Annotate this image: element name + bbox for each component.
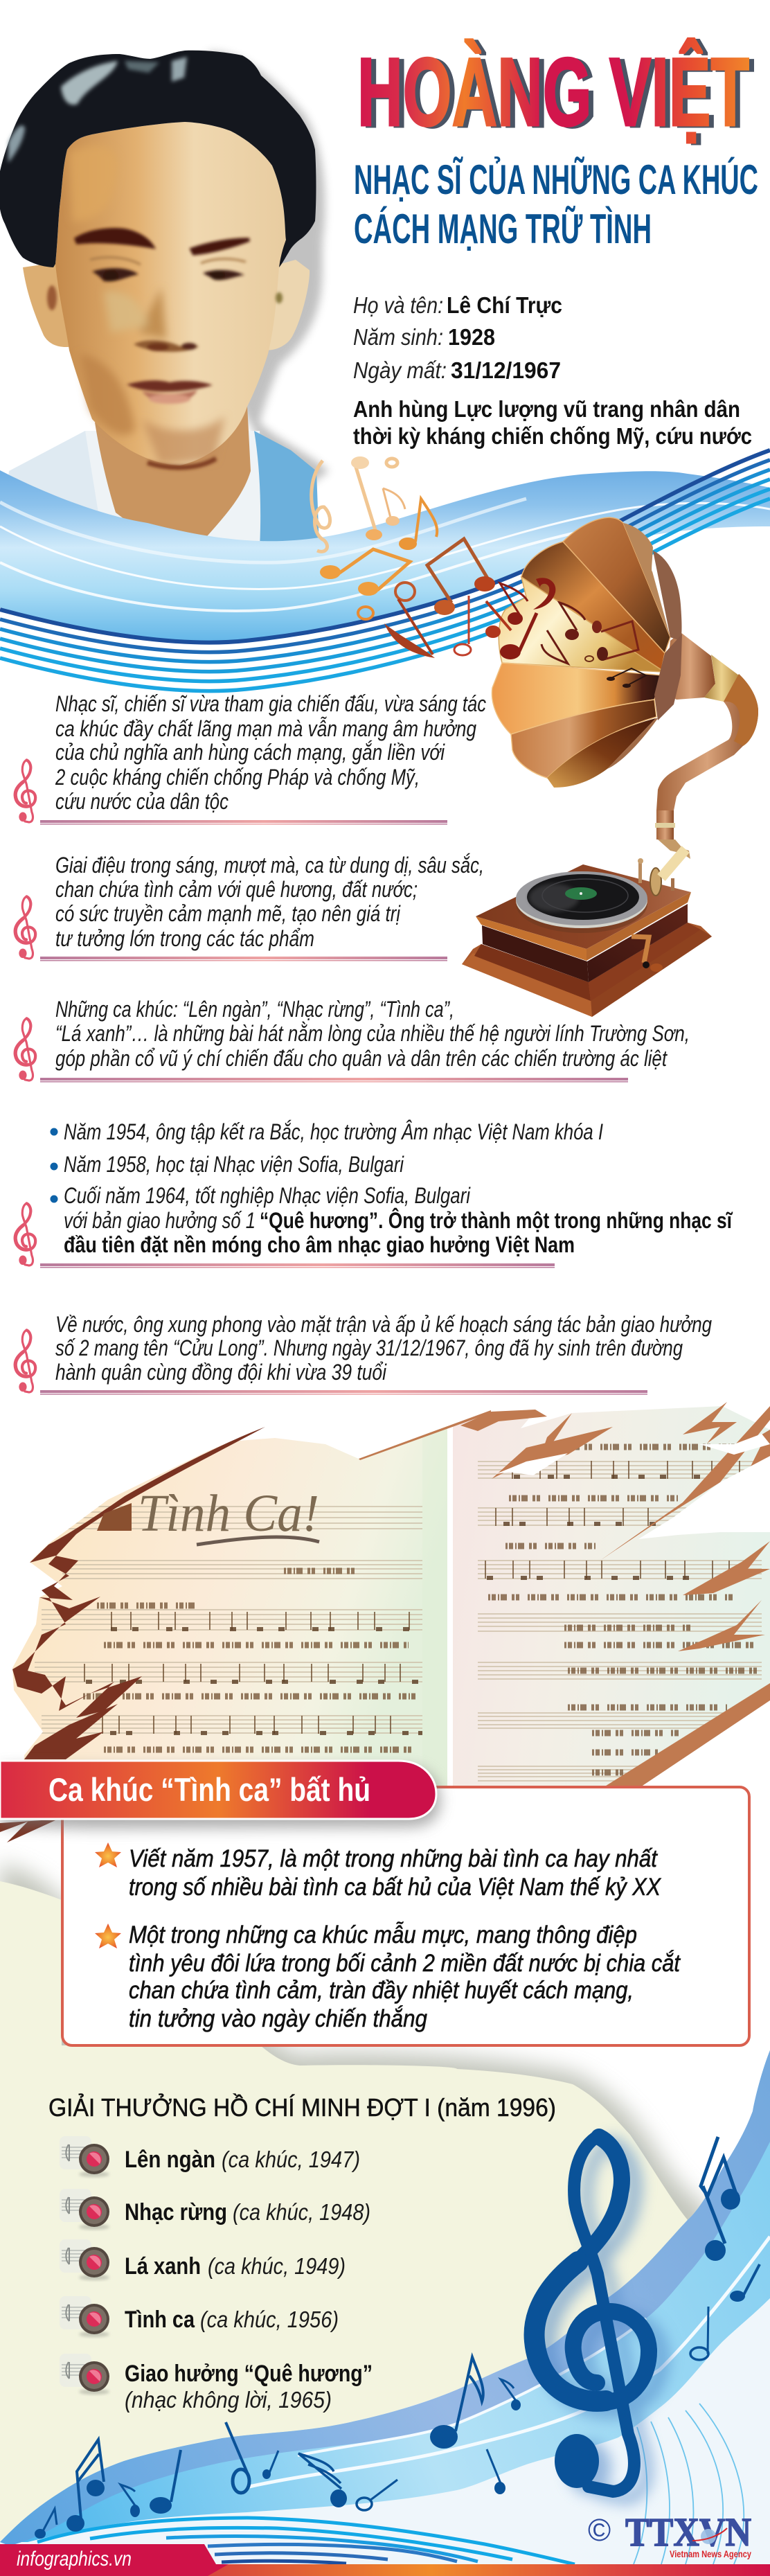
text block: composer and soldier (55, 691, 486, 814)
icon: pink treble clef 5 (15, 1330, 35, 1392)
award: Lá xanh: Lá xanh (125, 2253, 201, 2280)
pale base (0, 2251, 770, 2564)
wave: staff stripes (0, 450, 770, 691)
text: exemplary song: Một trong những ca khúc mẫu mực, mang thông điệp (129, 1921, 637, 1948)
hair highlights (8, 57, 187, 163)
text block: songs: Những ca khúc: “Lên ngàn”, “Nhạc rừng”, “Tình ca”, (55, 997, 454, 1022)
biography facts (353, 292, 752, 449)
award: Nhạc rừng: Nhạc rừng (125, 2199, 227, 2226)
text: exemplary song: chan chứa tình cảm, tràn đầy nhiệt huyết cách mạng, (129, 1977, 634, 2004)
text block: composer and soldier: 2 cuộc kháng chiến chống Pháp và chống Mỹ, (55, 765, 420, 790)
logo: TTXVN: © (588, 2512, 611, 2548)
award: Nhạc rừng: (ca khúc, 1948) (233, 2199, 370, 2225)
cream panel (0, 1881, 688, 2542)
text block: study timeline: với bản giao hưởng số 1 (64, 1208, 256, 1233)
text block: songs (55, 997, 690, 1071)
gramophone (462, 517, 758, 1017)
music notes: rising from the horn (312, 456, 646, 688)
portrait shadow (208, 52, 329, 499)
clothes (0, 431, 319, 547)
text block: sacrifice: hành quân cùng đồng đội khi vừa 39 tuổi (55, 1360, 387, 1385)
text block: composer and soldier: cứu nước của dân tộc (55, 789, 229, 814)
text block: composer and soldier: ca khúc đầy chất lãng mạn mà vẫn mang âm hưởng (55, 716, 476, 741)
biography facts: Năm sinh: (353, 324, 443, 350)
face shading (69, 145, 225, 464)
logo: TTXVN: TTXVN (625, 2510, 751, 2555)
turntable box (462, 864, 712, 1017)
torn paper edges: dark brown (0, 1427, 265, 1842)
periwinkle band (0, 2050, 770, 2546)
award: Tình ca: (ca khúc, 1956) (200, 2307, 339, 2332)
icon: pink treble clef 3 (15, 1018, 35, 1081)
hair (0, 51, 316, 267)
face (55, 122, 286, 465)
biography facts: Ngày mất: (353, 357, 447, 383)
text: exemplary song: tin tưởng vào ngày chiến thắng (129, 2005, 427, 2032)
handwritten notes and lyrics (76, 1447, 762, 1773)
biography facts: Họ và tên: (353, 292, 443, 318)
icon: disc 4 (60, 2296, 109, 2337)
biography facts: 31/12/1967 (451, 357, 561, 383)
divider 4 (40, 1263, 555, 1268)
fine arcs (634, 2404, 744, 2564)
staff stripes (37, 2518, 575, 2564)
handwritten song title: Tình Ca! (138, 1484, 319, 1543)
text block: study timeline: Năm 1954, ông tập kết ra Bắc, học trường Âm nhạc Việt Nam khóa I (64, 1119, 603, 1144)
text block: melody: có sức truyền cảm mạnh mẽ, tạo nên giá trị (55, 901, 401, 926)
panel: Tình ca (62, 1787, 749, 2045)
text: written in 1957 (129, 1845, 661, 1901)
logo: TTXVN (588, 2510, 751, 2559)
text block: study timeline: Cuối năm 1964, tốt nghiệp Nhạc viện Sofia, Bulgari (64, 1183, 471, 1208)
pages (0, 1399, 770, 1801)
heading: Hồ Chí Minh prize: GIẢI THƯỞNG HỒ CHÍ MINH ĐỢT I (năm 1996) (48, 2093, 556, 2122)
text block: melody: tư tưởng lớn trong các tác phẩm (55, 926, 314, 951)
wave: top blue swoosh (0, 470, 770, 643)
icon: disc 2 (60, 2189, 109, 2230)
award: Giao hưởng Quê hương: (nhạc không lời, 1965) (125, 2387, 332, 2413)
award list (60, 2136, 373, 2413)
award: Lá xanh: (ca khúc, 1949) (208, 2253, 346, 2279)
notes over left band (35, 2440, 181, 2539)
text: written in 1957: trong số nhiều bài tình ca bất hủ của Việt Nam thế kỷ XX (129, 1874, 661, 1901)
footer tab: infographics.vn: infographics.vn (17, 2548, 132, 2570)
facial features (47, 230, 283, 468)
icon: disc 5 (60, 2354, 109, 2395)
red-brown notes (384, 539, 511, 658)
torn paper gashes: white (496, 1434, 770, 1794)
icon: pink treble clef 4 (15, 1203, 35, 1265)
cyan band (0, 2050, 770, 2542)
award: Giao hưởng Quê hương: Giao hưởng “Quê hương” (125, 2361, 373, 2387)
white streaks (249, 2237, 770, 2487)
notes over middle band (226, 2357, 521, 2510)
pale and orange notes (312, 456, 437, 619)
star bullet 2 (95, 1924, 121, 1948)
divider 1 (40, 820, 447, 824)
text block: sacrifice (55, 1312, 712, 1385)
record on platter (516, 871, 647, 933)
icon: pink treble clef 1 (15, 760, 35, 822)
sheet music manuscript (0, 1399, 770, 1842)
ears and neck (23, 260, 310, 547)
award: Lên ngàn (125, 2147, 360, 2173)
text: exemplary song (129, 1921, 681, 2032)
logo: TTXVN: Vietnam News Agency (670, 2549, 751, 2559)
text block: study timeline: đầu tiên đặt nền móng cho âm nhạc giao hưởng Việt Nam (64, 1232, 575, 1257)
banner: Ca khúc Tình ca bất hủ: Ca khúc “Tình ca” bất hủ (48, 1771, 370, 1808)
blue music notes (35, 2137, 760, 2539)
subtitle (354, 157, 758, 252)
notes over right band (690, 2137, 760, 2360)
text block: composer and soldier: Nhạc sĩ, chiến sĩ vừa tham gia chiến đấu, vừa sáng tác (55, 691, 486, 716)
footer tab: infographics.vn (0, 2544, 229, 2576)
award: Lá xanh (125, 2253, 346, 2280)
text block: melody: chan chứa tình cảm với quê hương, đất nước; (55, 877, 418, 902)
award: Tình ca (125, 2307, 339, 2333)
star bullet 1 (95, 1842, 121, 1867)
banner: Ca khúc Tình ca bất hủ (0, 1761, 440, 1829)
cream panel shadow (0, 1863, 710, 2424)
horn petals (492, 517, 682, 788)
text block: composer and soldier: của chủ nghĩa anh hùng cách mạng, gắn liền với (55, 740, 445, 765)
big blue treble clef (535, 2135, 661, 2498)
award: Nhạc rừng (125, 2199, 370, 2226)
text: written in 1957: Viết năm 1957, là một trong những bài tình ca hay nhất (129, 1845, 658, 1872)
footer bar (0, 2564, 770, 2576)
biography facts: Lê Chí Trực (447, 292, 562, 318)
icon: pink treble clef 2 (15, 896, 35, 959)
biography facts: 1928 (448, 324, 495, 350)
icon: disc 1 (60, 2136, 109, 2177)
tonearm and crank (632, 849, 686, 972)
portrait: Hoàng Việt (0, 51, 329, 547)
divider 3 (40, 1078, 628, 1082)
icon: disc 3 (60, 2239, 109, 2280)
divider 5 (40, 1390, 647, 1395)
text block: study timeline (50, 1119, 733, 1257)
bottom wave (0, 2050, 770, 2564)
divider 2 (40, 957, 447, 961)
text block: melody (55, 853, 484, 951)
award: Giao hưởng Quê hương (125, 2361, 373, 2413)
text block: melody: Giai điệu trong sáng, mượt mà, ca từ dung dị, sâu sắc, (55, 853, 484, 878)
horn neck and tube (655, 632, 758, 859)
torn paper edges: brown (359, 1402, 770, 1787)
dark notes on the horn (500, 578, 646, 688)
award: Tình ca: Tình ca (125, 2307, 195, 2333)
award: Lên ngàn: Lên ngàn (125, 2147, 215, 2173)
text: exemplary song: tình yêu đôi lứa trong bối cảnh 2 miền đất nước bị chia cắt (129, 1950, 681, 1977)
text block: study timeline: Năm 1958, học tại Nhạc viện Sofia, Bulgari (64, 1152, 404, 1177)
award: Lên ngàn: (ca khúc, 1947) (222, 2147, 360, 2172)
